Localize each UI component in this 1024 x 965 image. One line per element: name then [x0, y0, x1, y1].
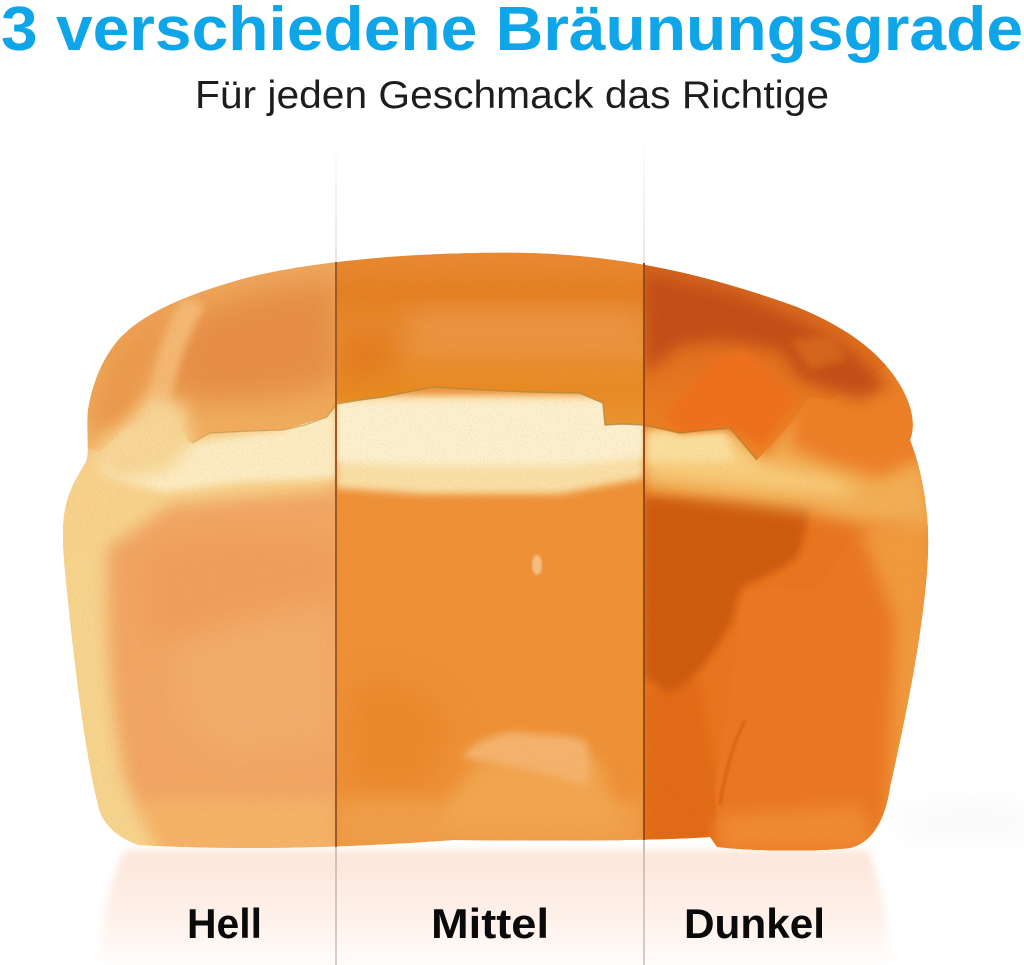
section: medium browning: [336, 250, 644, 860]
dark patch: [644, 495, 810, 693]
crust: [336, 250, 644, 425]
section: light browning: [50, 250, 340, 860]
crust: [790, 300, 930, 478]
soft crust to crumb transition: [92, 398, 192, 482]
crumb band: [336, 395, 644, 494]
section: dark browning: [644, 250, 944, 860]
crust: [87, 262, 335, 452]
loaf of bread: [50, 250, 944, 860]
label: Mittel: Mittel: [431, 900, 549, 947]
crust and crumb grain: [64, 396, 792, 841]
label: Hell: Hell: [187, 900, 262, 947]
divider lines: [335, 135, 645, 965]
crumb band: [645, 417, 928, 530]
label: Dunkel: Dunkel: [684, 900, 825, 947]
subtitle: Für jeden Geschmack das Richtige: [195, 74, 829, 117]
bread reflection on the table: [100, 806, 1024, 965]
